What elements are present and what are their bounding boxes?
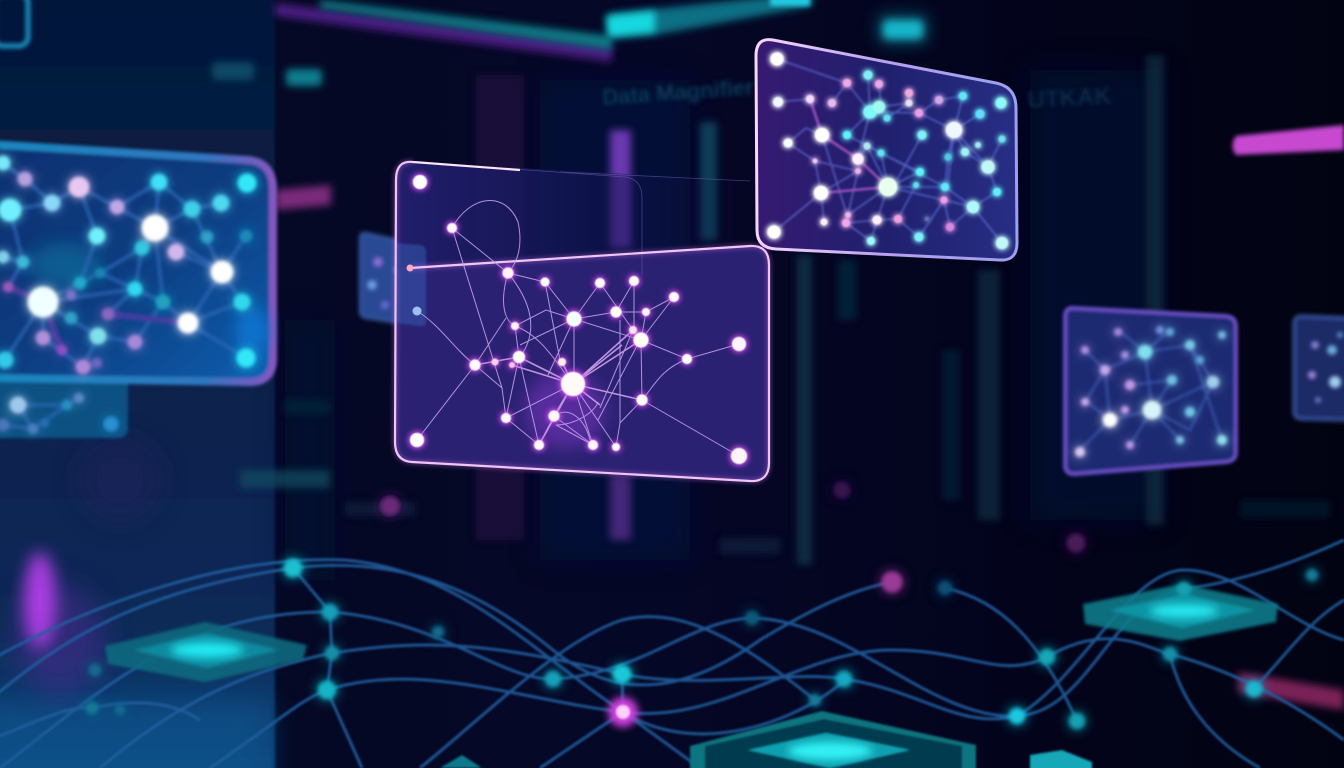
faint rounded edge of ghost card: [500, 168, 750, 275]
top right card links: [774, 59, 1002, 243]
right card nodes: [1075, 326, 1227, 457]
platform: bottom centre diamond: [690, 711, 976, 768]
panel: right network card: [1065, 308, 1236, 474]
small panel showing through: [396, 243, 426, 326]
platform: small bottom right: [1030, 750, 1092, 768]
lower overlapped card: [0, 345, 128, 438]
top edge pin: [406, 264, 414, 272]
left card links: [3, 163, 246, 429]
card body: [756, 40, 1017, 260]
hub glow: [525, 372, 605, 448]
central card links: [417, 200, 739, 456]
magenta hub node: [608, 697, 638, 727]
ghost upper card: [396, 162, 750, 269]
platform: small bottom left: [440, 755, 482, 768]
lower card fill: [395, 246, 769, 481]
panel: left network card: [0, 144, 273, 438]
panel: far right network card: [1294, 316, 1344, 420]
card body: [1065, 308, 1236, 474]
top right card nodes: [768, 52, 1008, 249]
background server columns: [240, 55, 1330, 580]
blue glow in corner: [236, 306, 268, 354]
panel: top right network card: [756, 40, 1017, 260]
left card nodes: [0, 156, 256, 434]
neon pink bar right: [1232, 125, 1344, 155]
central card nodes: [410, 175, 747, 464]
pink stub beside left panel: [276, 185, 331, 210]
blue node over small panel: [412, 306, 422, 316]
right card links: [1080, 330, 1222, 450]
pink bar lower right: [1238, 672, 1344, 710]
small distant panel: [360, 233, 426, 326]
platform: left diamond: [105, 622, 307, 682]
bottom network: curves: [0, 540, 1344, 768]
far right card nodes: [1308, 332, 1343, 403]
platform: right diamond: [1083, 584, 1278, 641]
card body: [0, 144, 273, 382]
card outline: [395, 162, 769, 481]
blurred background label: right: UTKAK: [1027, 83, 1113, 114]
panel: central network card: [395, 162, 769, 481]
ceiling light beams: [212, 0, 928, 86]
left translucent column: [0, 0, 275, 768]
bottom network: nodes: [86, 482, 1318, 729]
blurred background label: left: Data Magnifier: [602, 74, 755, 110]
